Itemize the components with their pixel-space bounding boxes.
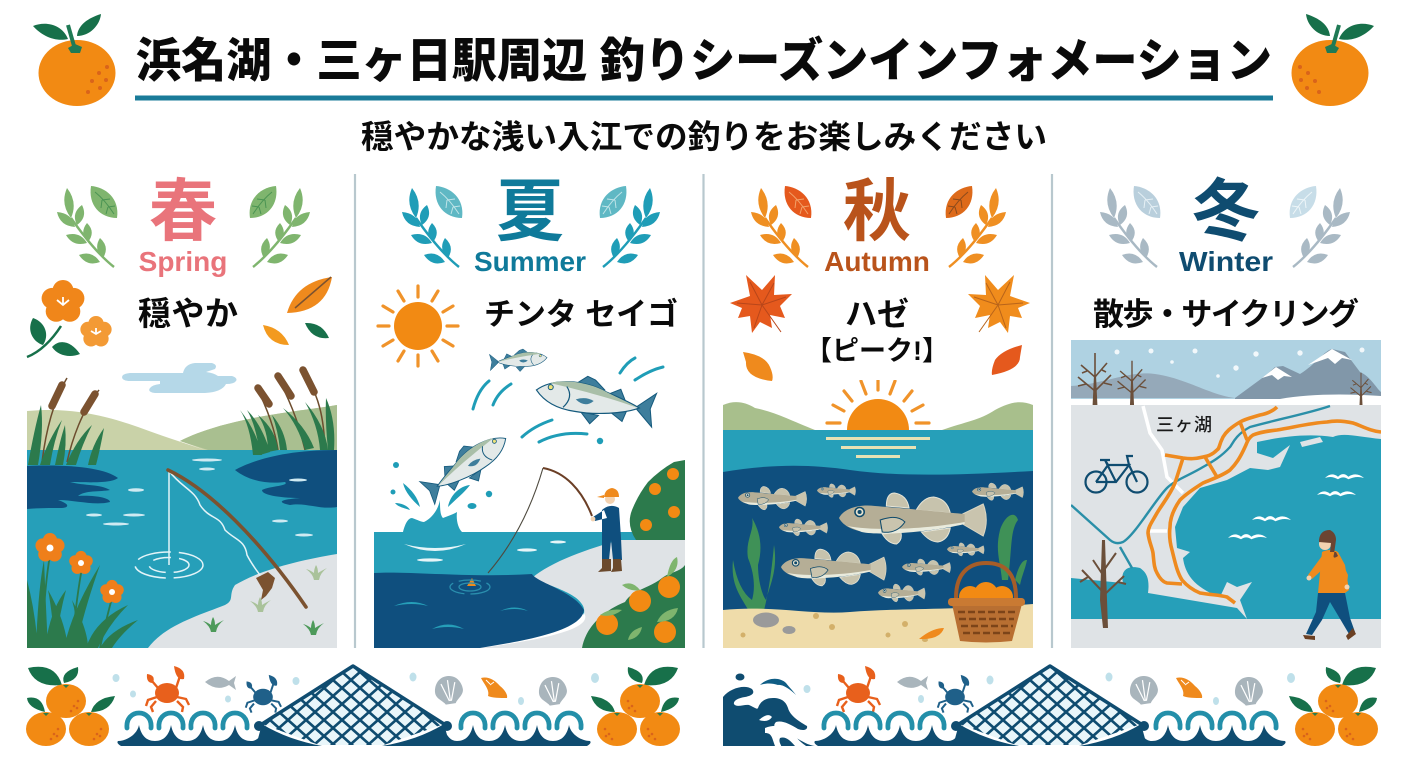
- cloud: [122, 363, 236, 393]
- oranges cluster left: [26, 667, 115, 746]
- spring caption: 穏やか: [138, 295, 238, 332]
- winter map scene: [1071, 340, 1381, 648]
- autumn leaf right: [946, 186, 972, 218]
- lake water: [27, 450, 337, 648]
- deep water: [374, 573, 584, 648]
- shell: [537, 675, 569, 707]
- shell: [1128, 674, 1160, 706]
- panel: winter: [1071, 174, 1381, 648]
- water splash droplets: [390, 462, 492, 510]
- spring fallen leaves: [263, 277, 332, 345]
- spring lake scene: [24, 363, 337, 648]
- cattails left: [28, 378, 104, 465]
- maple leaf left: [730, 275, 792, 333]
- crab: [146, 666, 189, 712]
- seaweed right: [998, 515, 1027, 585]
- map land: [1071, 405, 1381, 648]
- winter laurel left: [1100, 188, 1157, 267]
- droplet above splash: [597, 438, 603, 444]
- hills: [27, 405, 337, 450]
- oranges cluster right: [1289, 667, 1378, 746]
- fish: large sea bass: [534, 372, 658, 429]
- summer heading english: Summer: [474, 246, 586, 277]
- reeds and flowers foreground: [24, 533, 138, 648]
- summer laurel left: [402, 188, 459, 267]
- conch shell: [1176, 677, 1202, 698]
- sun: [378, 286, 458, 366]
- winter laurel right: [1293, 188, 1350, 267]
- spring heading kanji: 春: [149, 174, 217, 250]
- upper water: [723, 430, 1033, 475]
- setting sun: [847, 399, 909, 430]
- summer caption: チンタ セイゴ: [484, 297, 678, 332]
- water droplets: [804, 672, 1295, 705]
- footer border right: [723, 666, 1378, 746]
- title rule: [135, 96, 1273, 100]
- autumn heading english: Autumn: [824, 246, 930, 277]
- summer shore scene: [374, 460, 685, 648]
- conch shell: [481, 677, 507, 698]
- autumn lake scene: [723, 378, 1033, 648]
- school of gobies: [738, 483, 1023, 602]
- autumn caption fish name: ハゼ: [845, 296, 909, 332]
- cattails right: [240, 368, 334, 455]
- spring leaf right: [250, 186, 276, 218]
- panel: autumn: [723, 174, 1033, 648]
- seaweed left: [733, 518, 775, 618]
- header orange left: [33, 14, 116, 106]
- wave band right: [444, 713, 591, 746]
- fishing rod and reel: [168, 470, 306, 607]
- walker: [1303, 530, 1356, 640]
- autumn laurel left: [751, 188, 808, 267]
- water droplets: [112, 672, 599, 705]
- fish: small sea bream: [489, 349, 547, 372]
- map label: 三ヶ湖: [1156, 415, 1212, 435]
- small fallen leaves: [743, 345, 1022, 381]
- summer laurel right: [603, 188, 660, 267]
- shell: [433, 674, 465, 706]
- winter leaf left: [1134, 186, 1160, 218]
- panel: spring: [24, 174, 337, 648]
- teal road: [1071, 406, 1330, 568]
- great wave: [723, 674, 815, 746]
- fishing net: [951, 666, 1149, 746]
- lower left water: [1071, 567, 1247, 619]
- white river: [1143, 406, 1183, 531]
- wave band left: [117, 713, 264, 746]
- spring heading english: Spring: [139, 246, 227, 277]
- dark shallows left: [27, 466, 118, 509]
- winter leaf right: [1290, 186, 1316, 218]
- bicycle icon: [1086, 456, 1148, 492]
- shell: [1233, 675, 1265, 707]
- basket of oranges: [948, 563, 1025, 642]
- sun reflection: [826, 437, 930, 458]
- mountains: [1071, 373, 1235, 398]
- small fish: [897, 676, 928, 690]
- summer leaf right: [600, 186, 626, 218]
- foreground bare tree: [1080, 540, 1126, 628]
- fishing line: [488, 468, 543, 573]
- fishing line and ripples: [135, 471, 262, 578]
- stones and pebbles: [740, 612, 944, 642]
- subtitle: 穏やかな浅い入江での釣りをお楽しみください: [361, 119, 1047, 155]
- sun rays: [827, 378, 929, 423]
- crab: [837, 666, 880, 712]
- autumn heading kanji: 秋: [843, 174, 911, 250]
- blue crab: [246, 675, 281, 713]
- winter sky: [1071, 340, 1381, 400]
- hills: [723, 402, 1033, 430]
- wave band left: [814, 713, 961, 746]
- water highlights: [86, 458, 313, 536]
- sand floor: [723, 604, 1033, 648]
- fish: leaping sea bass: [415, 426, 517, 507]
- bushes with oranges: [582, 460, 685, 648]
- small fish: [205, 676, 236, 690]
- maple leaf right: [968, 275, 1030, 333]
- deep water: [723, 466, 1033, 615]
- angler: [543, 468, 622, 572]
- footer border left: [26, 666, 680, 746]
- summer leaf left: [436, 186, 462, 218]
- surface highlights: [404, 540, 566, 562]
- title: 浜名湖・三ヶ日駅周辺 釣りシーズンインフォメーション: [136, 34, 1272, 87]
- spring leaf left: [91, 186, 117, 218]
- summer heading kanji: 夏: [496, 174, 564, 250]
- snowflakes: [1114, 348, 1364, 388]
- bare trees top: [1078, 353, 1372, 405]
- column dividers: [355, 174, 1052, 648]
- autumn caption peak: 【ピーク!】: [805, 336, 949, 366]
- oranges cluster right: [591, 667, 680, 746]
- fishing net: [254, 666, 452, 746]
- splash lines: [473, 358, 663, 442]
- autumn laurel right: [949, 188, 1006, 267]
- sand bank: [148, 554, 337, 648]
- sand bank: [480, 540, 685, 648]
- winter caption: 散歩・サイクリング: [1093, 297, 1359, 332]
- panel: summer: [374, 174, 685, 648]
- wave band right: [1139, 713, 1286, 746]
- header orange right: [1292, 14, 1374, 106]
- spring laurel right: [253, 188, 310, 267]
- grass tufts: [203, 565, 327, 635]
- blue crab: [938, 675, 973, 713]
- autumn leaf left: [785, 186, 811, 218]
- upper water with splash crown: [374, 500, 640, 600]
- spring laurel left: [57, 188, 114, 267]
- spring flower decoration: [27, 280, 112, 357]
- small islet: [1300, 437, 1323, 447]
- sea wave marks: [1228, 474, 1364, 539]
- winter heading english: Winter: [1179, 246, 1273, 277]
- orange roads: [1148, 407, 1381, 603]
- winter heading kanji: 冬: [1192, 174, 1260, 250]
- shoreline shade: [551, 586, 584, 615]
- snowfield: [1071, 395, 1381, 406]
- bay water: [1175, 435, 1381, 619]
- bobber and ripples: [394, 578, 528, 629]
- dark shallows right: [235, 450, 337, 508]
